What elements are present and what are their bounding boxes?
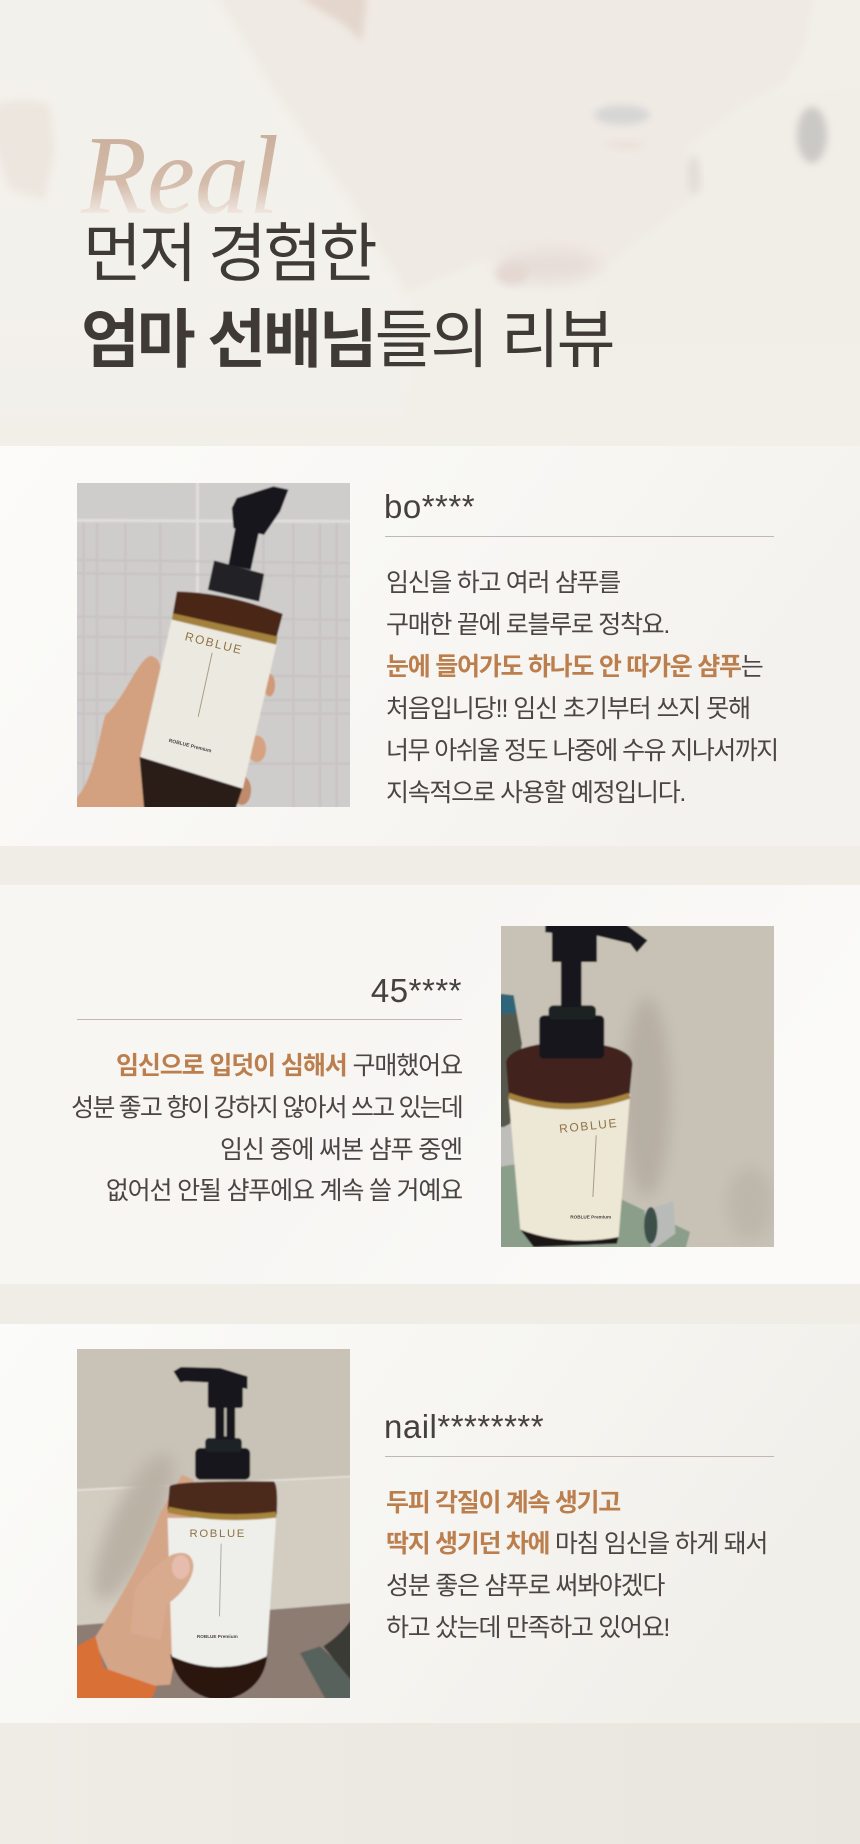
- review panel 1: [0, 446, 860, 846]
- review text: 없어선 안될 샴푸에요 계속 쓸 거예요: [106, 1177, 462, 1205]
- hero photo: mother and baby: [301, 0, 830, 286]
- photo: hand holding bottle in bathroom: ROBLUE Premium: [197, 1634, 238, 1639]
- review text: 임신을 하고 여러 샴푸를: [386, 569, 620, 597]
- review text: [386, 569, 778, 807]
- divider: [77, 1018, 462, 1020]
- review text: 임신으로 입덧이 심해서 구매했어요: [116, 1052, 462, 1080]
- photo: bottle on a shelf: ROBLUE: [558, 1116, 619, 1136]
- review panel 3: [0, 1324, 860, 1723]
- review text: 눈에 들어가도 하나도 안 따가운 샴푸는: [386, 653, 763, 681]
- review text: 지속적으로 사용할 예정입니다.: [386, 779, 685, 807]
- review panel 2: [0, 885, 860, 1284]
- review text: 두피 각질이 계속 생기고: [386, 1489, 620, 1517]
- hero panel: [0, 0, 860, 460]
- review text: [71, 1052, 462, 1205]
- review text: 성분 좋고 향이 강하지 않아서 쓰고 있는데: [71, 1094, 462, 1122]
- review text: [386, 1489, 767, 1642]
- reviewer name: nail********: [384, 1408, 544, 1445]
- divider: [385, 1456, 774, 1458]
- review text: 임신 중에 써본 샴푸 중엔: [220, 1136, 462, 1164]
- photo: bottle on a shelf: ROBLUE Premium: [570, 1215, 611, 1220]
- photo: hand holding bottle in bathroom: ROBLUE: [190, 1528, 246, 1540]
- review text: 너무 아쉬울 정도 나중에 수유 지나서까지: [386, 737, 778, 765]
- reviewer name: bo****: [384, 488, 475, 525]
- photo: hand holding bottle against grey tiles: [77, 483, 350, 807]
- divider: [385, 536, 774, 538]
- review text: 구매한 끝에 로블루로 정착요.: [386, 611, 669, 639]
- reviewer name: 45****: [371, 972, 462, 1009]
- script word: Real: Real: [80, 114, 279, 238]
- photo: hand holding bottle against grey tiles: ROBLUE Premium: [168, 738, 213, 755]
- footer band: [0, 1723, 860, 1844]
- photo: bottle on a shelf: [501, 926, 774, 1247]
- review text: 성분 좋은 샴푸로 써봐야겠다: [386, 1572, 665, 1600]
- photo: hand holding bottle in bathroom: [77, 1349, 350, 1698]
- title line 1: 먼저 경험한: [83, 218, 376, 290]
- title line 2: 엄마 선배님들의 리뷰: [81, 304, 613, 376]
- photo: hand holding bottle against grey tiles: ROBLUE: [183, 629, 244, 657]
- review text: 처음입니당!! 임신 초기부터 쓰지 못해: [386, 695, 750, 723]
- review text: 하고 샀는데 만족하고 있어요!: [386, 1614, 669, 1642]
- review text: 딱지 생기던 차에 마침 임신을 하게 돼서: [386, 1530, 767, 1558]
